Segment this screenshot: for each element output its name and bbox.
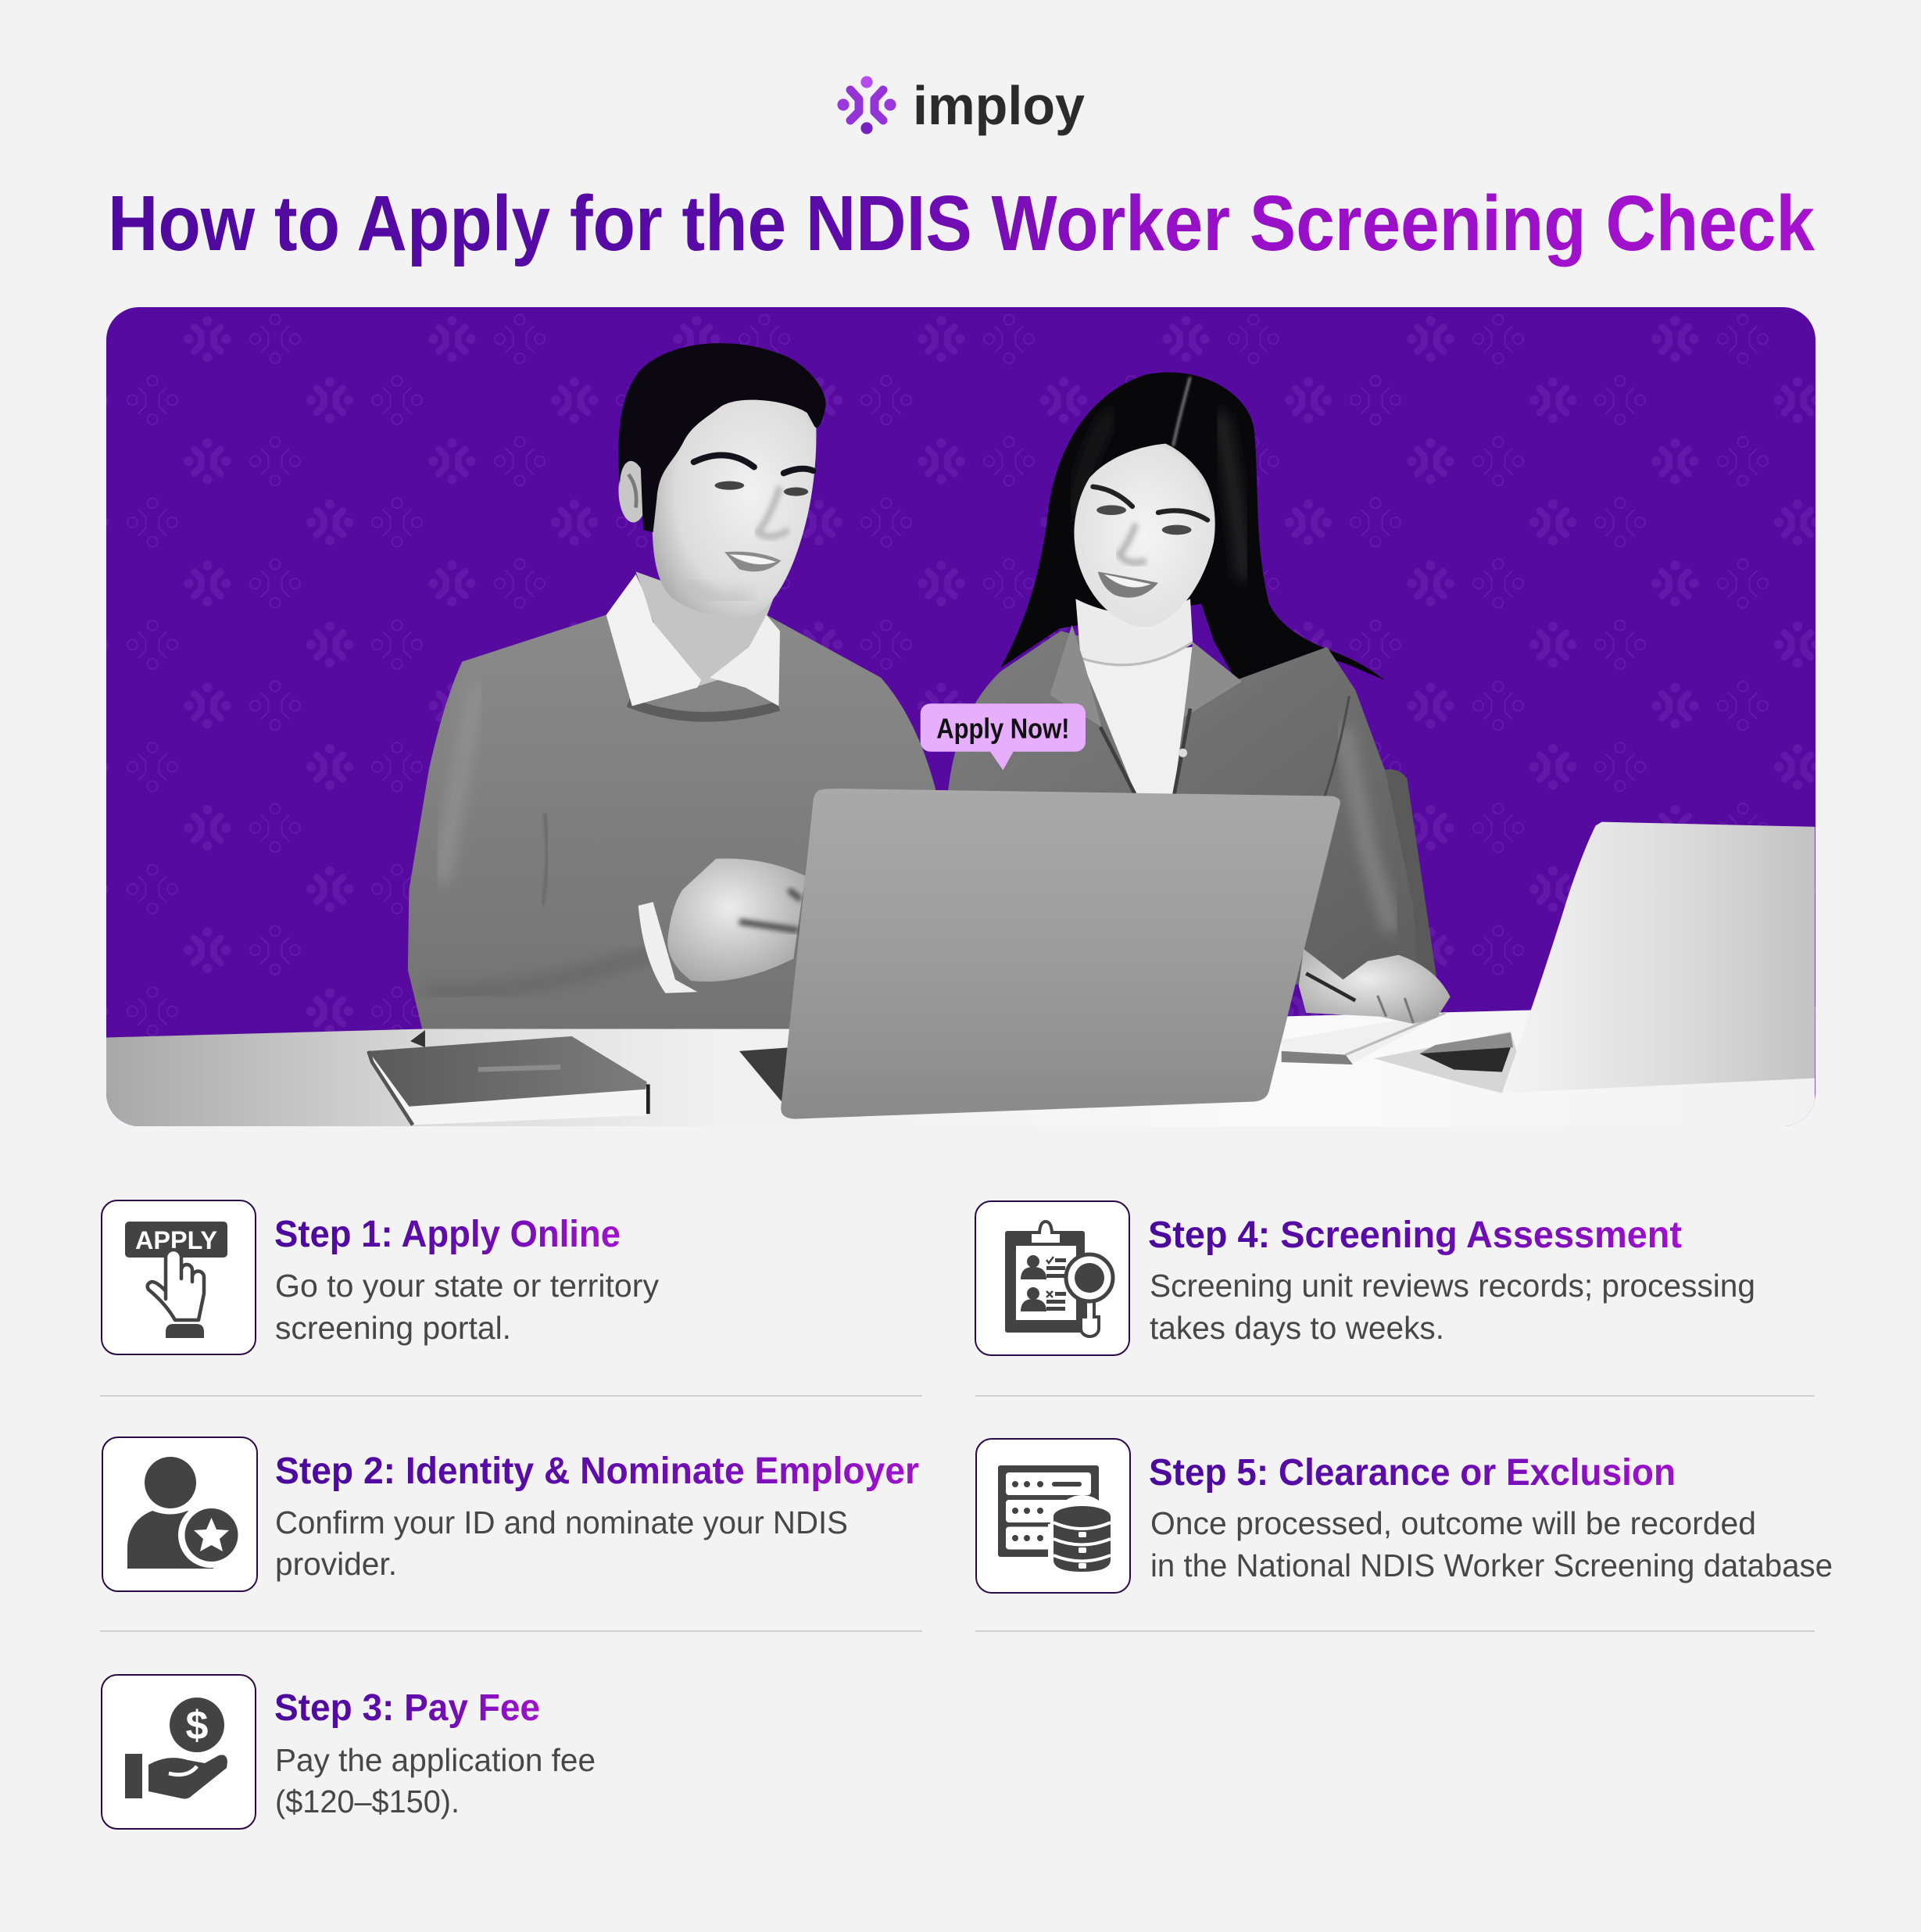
icon: hand holding dollar coin xyxy=(102,1675,256,1829)
speech bubble: Apply Now: Apply Now! xyxy=(936,712,1069,744)
step 3 xyxy=(102,1675,596,1829)
step 1 description: screening portal. xyxy=(275,1310,511,1346)
step 2 heading: Step 2: Identity & Nominate Employer xyxy=(275,1451,919,1492)
step 5 heading: Step 5: Clearance or Exclusion xyxy=(1149,1452,1676,1494)
speech bubble: Apply Now xyxy=(921,703,1086,770)
step 4 description: Screening unit reviews records; processing xyxy=(1150,1268,1755,1304)
table xyxy=(106,1005,1815,1126)
step 3 heading: Step 3: Pay Fee xyxy=(274,1687,540,1729)
notebook xyxy=(368,1030,649,1125)
chair xyxy=(1383,769,1436,979)
step 5 xyxy=(976,1439,1833,1593)
hero panel: two people at laptops xyxy=(106,307,1815,1146)
notepad and woman's hands xyxy=(1282,949,1451,1064)
step 2 xyxy=(102,1437,919,1591)
step 4 heading: Step 4: Screening Assessment xyxy=(1148,1215,1682,1256)
logo: imploy: imploy xyxy=(913,75,1085,136)
main laptop xyxy=(739,789,1340,1119)
step 5 description xyxy=(1150,1505,1833,1583)
step 1 heading: Step 1: Apply Online xyxy=(274,1214,621,1255)
icon: apply button with pointing hand xyxy=(102,1200,256,1354)
step 3 description: ($120–$150). xyxy=(275,1784,460,1819)
logo: imploy xyxy=(837,75,1085,136)
step 2 description: Confirm your ID and nominate your NDIS xyxy=(275,1504,848,1540)
right laptop xyxy=(1374,822,1815,1093)
step 5 description: in the National NDIS Worker Screening database xyxy=(1150,1547,1833,1583)
step 2 description xyxy=(275,1504,848,1582)
step 2 description: provider. xyxy=(275,1546,397,1582)
step 5 description: Once processed, outcome will be recorded xyxy=(1150,1505,1756,1541)
step 1 description: Go to your state or territory xyxy=(275,1268,659,1304)
step 1 description xyxy=(275,1268,659,1346)
icon: server rack with database xyxy=(976,1439,1130,1593)
icon: clipboard with magnifier xyxy=(975,1201,1129,1355)
icon: hand holding dollar coin: $ xyxy=(186,1703,209,1748)
step 3 description: Pay the application fee xyxy=(275,1742,596,1778)
woman xyxy=(946,372,1417,986)
step 3 description xyxy=(275,1742,596,1819)
man xyxy=(408,343,943,1041)
step 4 description: takes days to weeks. xyxy=(1150,1310,1444,1346)
step 4 description xyxy=(1150,1268,1755,1346)
step 4 xyxy=(975,1201,1755,1355)
step 1 xyxy=(102,1200,659,1354)
icon: person with star badge xyxy=(102,1437,257,1591)
icon: apply button with pointing hand: APPLY xyxy=(135,1226,217,1254)
